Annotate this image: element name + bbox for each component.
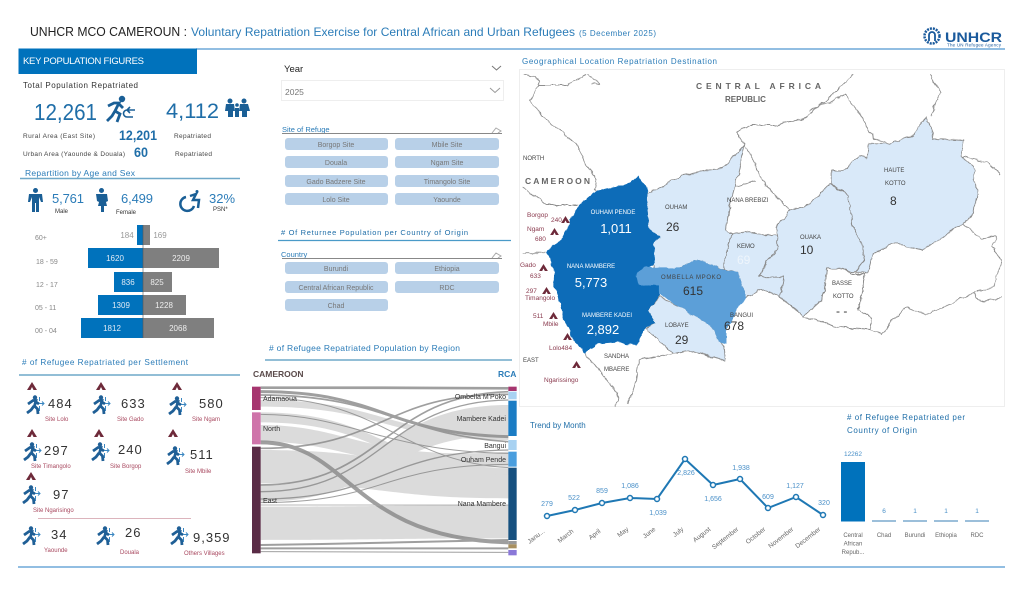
map labels: MAMBERE KADEI [582, 313, 632, 319]
map labels: Ngarissingo [544, 377, 579, 384]
line chart: 609 [762, 494, 774, 501]
heading: country of origin: Country of Origin [847, 426, 917, 435]
line chart: 522 [568, 495, 580, 502]
line chart: November [767, 526, 796, 550]
figure: 4,112: 4,112 [166, 100, 219, 123]
filter: site of refuge [282, 125, 502, 205]
map labels: Gado [520, 262, 536, 269]
line chart: July [672, 526, 686, 539]
bar chart: Ethiopia [935, 533, 958, 539]
text: total population repatriated: Total Population Repatriated [23, 81, 138, 90]
map labels: Borgop [527, 212, 548, 219]
settlement values: 9,359 [193, 530, 231, 545]
breakdown: rural [23, 127, 211, 143]
bar chart: Chad [877, 533, 891, 539]
bar chart: African [844, 542, 862, 548]
figure: PSN [209, 191, 235, 213]
line chart: 1,656 [704, 496, 722, 503]
figure: 12,261: 12,261 [34, 99, 97, 125]
figure: PSN: PSN* [213, 207, 228, 213]
sankey labels: Ombella M'Poko [455, 394, 506, 401]
map tents [539, 216, 581, 368]
heading: settlement: # of Refugee Repatriated per Settlement [22, 358, 189, 367]
map labels: NANA MAMBERE [567, 264, 615, 270]
chart: population pyramid: 1228 [155, 301, 173, 310]
chart: population pyramid: 18 - 59 [36, 259, 58, 266]
filter: site of refuge: Borgop Site [318, 142, 354, 149]
settlement values: 26 [125, 525, 141, 540]
map labels: 633 [530, 273, 541, 280]
figure: male: 5,761 [52, 191, 84, 206]
panel: filters [278, 64, 511, 311]
settlement names [31, 417, 225, 557]
map labels: 29 [675, 333, 689, 347]
map labels: 297 [526, 288, 537, 295]
map labels: CENTRAL AFRICA [696, 81, 821, 91]
figure: male [52, 191, 84, 215]
title: UNHCR MCO CAMEROUN : [30, 25, 187, 39]
settlement names: Others Villages [184, 551, 225, 557]
bar chart: 12262 [844, 451, 862, 458]
bar chart: 1 [913, 508, 917, 515]
map labels: EAST [523, 358, 539, 364]
filter: country: RDC [439, 285, 455, 292]
tents [26, 382, 182, 480]
map labels: 5,773 [575, 275, 607, 290]
map labels: CAMEROON [525, 176, 590, 186]
sankey labels: Ouham Pende [461, 457, 506, 464]
map labels: 26 [666, 220, 680, 234]
map labels: 69 [737, 253, 751, 267]
panel: trend by month [527, 421, 830, 551]
settlement values: 580 [199, 396, 224, 411]
line chart: June [642, 526, 658, 540]
figure: PSN: 32% [209, 191, 235, 206]
sankey labels: Mambere Kadei [457, 416, 506, 423]
chart: population pyramid: 12 - 17 [36, 282, 58, 289]
map labels: OMBELLA MPOKO [661, 275, 721, 281]
region: Lobaye [646, 297, 725, 362]
filter: site of refuge: Douala [325, 160, 347, 167]
line chart: 1,127 [786, 483, 804, 490]
panel: map [520, 57, 1004, 407]
bar chart: Central [843, 533, 863, 539]
chart: population pyramid: 836 [121, 278, 135, 287]
line chart: December [794, 526, 823, 550]
map labels: MBAERE [604, 367, 629, 373]
map labels: BANGUI [730, 313, 753, 319]
filter: site of refuge: Gado Badzere Site [306, 179, 366, 186]
bar chart [841, 451, 989, 556]
chart: population pyramid: 05 - 11 [35, 305, 56, 312]
filter: country [281, 250, 502, 311]
sankey labels: Adamaoua [263, 396, 297, 403]
map labels: OUHAM PENDE [591, 210, 635, 216]
axis labels: CAMEROON [253, 369, 304, 379]
map labels: REPUBLIC [725, 95, 766, 104]
icon: male [28, 188, 43, 212]
map labels: 678 [724, 319, 744, 333]
panel: refugees per settlement [19, 358, 240, 557]
map labels: Mbile [543, 321, 559, 328]
figure: female: Female [116, 210, 137, 216]
breakdown: rural: 12,201 [119, 127, 157, 143]
heading: repartition: Repartition by Age and Sex [25, 168, 136, 178]
settlement names: Site Lolo [45, 417, 69, 423]
filter: year: Year [284, 64, 303, 75]
region: Ouham Pende, Nana Mambere, Mambere Kadei [548, 176, 659, 353]
figure: male: Male [55, 209, 69, 215]
breakdown: urban: Repatriated [175, 151, 212, 158]
figure: female: 6,499 [121, 191, 153, 206]
filter: country: Central African Republic [298, 285, 374, 292]
map labels: Lolo484 [549, 345, 573, 352]
map labels: OUAKA [800, 235, 821, 241]
filter: year [282, 64, 504, 100]
line chart: 1,039 [649, 510, 667, 517]
heading: trend: Trend by Month [530, 421, 586, 430]
heading: country of origin [847, 413, 965, 435]
title: Voluntary Repatriation Exercise for Central African and Urban Refugees [191, 25, 575, 39]
panel: sankey by region [252, 343, 517, 555]
settlement names: Site Ngarisingo [33, 508, 74, 514]
line chart: May [616, 526, 631, 539]
bar chart: 6 [882, 508, 886, 515]
chart: population pyramid: 2068 [169, 324, 187, 333]
map labels: 10 [800, 243, 814, 257]
map labels: NANA BREBIZI [727, 198, 769, 204]
region: Kemo [724, 232, 784, 298]
map labels: LOBAYE [665, 323, 689, 329]
icon: returnee runner [107, 97, 135, 122]
logo: UNHCR: UNHCR [945, 29, 1002, 45]
chart: population pyramid: 1620 [106, 254, 124, 263]
map labels: OUHAM [665, 205, 687, 211]
panel: refugees by country of origin [841, 413, 989, 556]
line chart [527, 456, 830, 551]
breakdown: urban: Urban Area (Yaounde & Douala) [23, 151, 125, 158]
line chart: 1,938 [732, 465, 750, 472]
panel: repartition by age and sex [20, 168, 240, 338]
settlement values: 511 [190, 447, 214, 462]
map labels: 1,011 [600, 221, 632, 236]
map labels: 2,892 [587, 322, 619, 337]
runner icons [23, 395, 188, 545]
heading: country of origin: # of Refugee Repatriated per [847, 413, 965, 422]
sankey labels [263, 394, 506, 508]
map labels: 680 [535, 236, 546, 243]
line chart: August [692, 526, 712, 544]
line chart: October [745, 526, 768, 546]
map labels: KOTTO [833, 294, 854, 300]
line chart: 279 [541, 501, 553, 508]
settlement names: Yaounde [44, 548, 68, 554]
map labels: SANDHA [604, 354, 629, 360]
line chart: 320 [818, 500, 830, 507]
figure: female [116, 191, 153, 216]
filter: site of refuge: Ngam Site [431, 160, 463, 167]
region: Haute Kotto [832, 117, 977, 273]
settlement values: 240 [118, 442, 143, 457]
title [30, 25, 656, 39]
settlement values: 34 [51, 527, 67, 542]
bar chart: RDC [970, 533, 984, 539]
settlement names: Site Timangolo [31, 464, 71, 470]
filter: site of refuge: Yaounde [433, 197, 461, 204]
chart: population pyramid: 2209 [172, 254, 190, 263]
chart: population pyramid: 1812 [103, 324, 121, 333]
chart: population pyramid [35, 225, 219, 338]
map labels: BASSE [832, 281, 852, 287]
map labels: NORTH [523, 156, 544, 162]
line chart: March [557, 528, 576, 545]
chart: population pyramid: 169 [153, 231, 167, 240]
filter: country: Country [281, 250, 308, 259]
heading: sankey: # of Refugee Repatriated Population by Region [269, 343, 460, 353]
heading: key population figures [18, 48, 197, 74]
axis labels: RCA [498, 369, 516, 379]
map labels: - - [836, 304, 847, 318]
chart: population pyramid: 00 - 04 [35, 328, 57, 335]
filter: country: Burundi [324, 266, 349, 273]
line chart: April [588, 528, 603, 542]
bar chart: Repub... [842, 550, 865, 556]
breakdown: urban [23, 144, 212, 160]
region: Basse Kotto [803, 268, 873, 330]
chart: population pyramid: 825 [150, 278, 164, 287]
filter: year: 2025 [285, 87, 304, 97]
filter: site of refuge: Site of Refuge [282, 125, 330, 134]
chart: sankey flows [252, 387, 517, 555]
chart: population pyramid: 184 [120, 231, 134, 240]
line chart: September [711, 526, 741, 551]
line chart: 1,086 [621, 483, 639, 490]
heading: returnee population: # Of Returnee Population per Country of Origin [281, 228, 468, 237]
sankey labels: North [263, 426, 280, 433]
bar chart: 1 [975, 508, 979, 515]
map labels: KOTTO [885, 181, 906, 187]
map: regions [523, 74, 1002, 407]
map labels: HAUTE [884, 168, 904, 174]
settlement values: 484 [48, 396, 73, 411]
bar chart: Burundi [905, 533, 925, 539]
bar chart: 1 [944, 508, 948, 515]
settlement values [44, 396, 231, 545]
line chart: 2,826 [677, 470, 695, 477]
sankey labels: East [263, 498, 277, 505]
breakdown: rural: Rural Area (East Site) [23, 133, 95, 140]
icon: family [225, 98, 250, 117]
map labels: 8 [890, 194, 897, 208]
filter: country: Ethiopia [434, 266, 460, 273]
filter: site of refuge: Timangolo Site [424, 179, 470, 186]
chart: population pyramid: 60+ [35, 235, 47, 242]
title: (5 December 2025) [579, 29, 656, 38]
logo: UNHCR [924, 28, 1002, 48]
axis labels [253, 369, 516, 379]
line chart: Janu... [527, 528, 546, 546]
chart: population pyramid: 1309 [112, 301, 130, 310]
filter: country: Chad [328, 303, 344, 310]
settlement names: Site Gado [117, 417, 144, 423]
region: Ouaka [760, 183, 865, 317]
settlement values: 297 [44, 443, 69, 458]
map labels: 240 [551, 217, 562, 224]
icon: female [96, 188, 108, 212]
panel: key population figures [18, 48, 250, 160]
sankey labels: Nana Mambere [458, 501, 506, 508]
breakdown: urban: 60 [134, 144, 148, 160]
nodes [252, 387, 517, 555]
map labels: 511 [533, 313, 544, 320]
settlement names: Site Mbile [185, 469, 212, 475]
map labels: Ngam [527, 226, 544, 233]
breakdown: rural: Repatriated [174, 133, 211, 140]
heading: key population figures: KEY POPULATION FIGURES [23, 56, 144, 67]
filter: site of refuge: Lolo Site [322, 197, 350, 204]
icon: wheelchair [180, 190, 199, 211]
region: Ouham [646, 145, 744, 270]
settlement names: Site Borgop [110, 464, 142, 470]
map labels [520, 81, 906, 384]
settlement values: 97 [53, 487, 69, 502]
settlement names: Douala [120, 550, 140, 556]
filter: site of refuge: Mbile Site [432, 142, 462, 149]
line chart: 859 [596, 488, 608, 495]
sankey labels: Bangui [484, 443, 506, 450]
map labels: 615 [683, 284, 703, 298]
heading: map: Geographical Location Repatriation Destination [522, 57, 717, 66]
settlement values: 633 [121, 396, 146, 411]
settlement names: Site Ngam [192, 417, 220, 423]
logo: UNHCR: The UN Refugee Agency [947, 42, 1002, 48]
map labels: Timangolo [525, 295, 555, 302]
region: Ombella M'Poko [636, 260, 746, 343]
map labels: KEMO [737, 244, 755, 250]
